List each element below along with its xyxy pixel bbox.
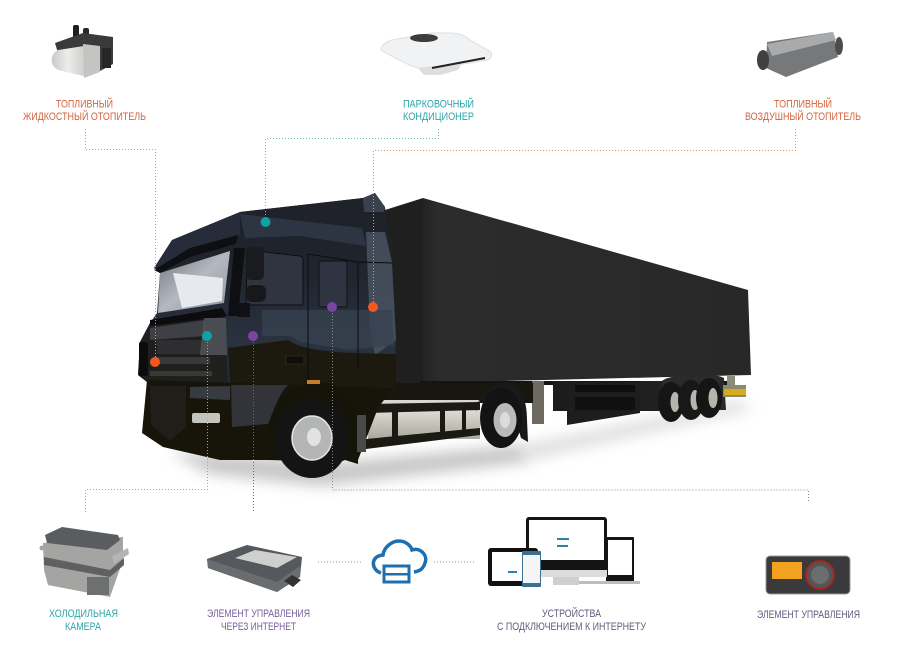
- label: fridge: КАМЕРА: [65, 621, 102, 633]
- front wheel: [268, 382, 358, 478]
- door reflection: [262, 310, 394, 350]
- lower door band: [228, 340, 396, 392]
- icon: air heater: [757, 32, 843, 77]
- label: internet control unit: [207, 608, 310, 633]
- label: liquid heater: ЖИДКОСТНЫЙ ОТОПИТЕЛЬ: [23, 110, 146, 123]
- label: fridge: [49, 608, 118, 633]
- truck illustration: [138, 193, 752, 486]
- icon: parking air conditioner: [381, 33, 492, 75]
- icon: control panel: [766, 556, 850, 594]
- cab rear panel: [366, 232, 396, 355]
- icon: liquid heater: [52, 25, 113, 78]
- icon: internet control unit: [207, 545, 302, 592]
- cab front panel: [138, 308, 228, 384]
- label: air heater: ВОЗДУШНЫЙ ОТОПИТЕЛЬ: [745, 110, 861, 123]
- marker dots: [150, 217, 378, 367]
- ground shadow: [170, 400, 752, 486]
- front grille: [150, 386, 186, 441]
- icon: cloud: [373, 541, 426, 582]
- label: parking air conditioner: ПАРКОВОЧНЫЙ: [403, 98, 474, 110]
- icon: fridge box: [40, 527, 129, 597]
- door lines: [308, 254, 392, 380]
- door handle: [286, 356, 304, 364]
- trailer wheels: [658, 378, 722, 422]
- connector lines: [86, 129, 808, 562]
- bumper highlight: [190, 386, 230, 400]
- exhaust pipe: [357, 415, 366, 452]
- step panel: [231, 385, 288, 427]
- cab roof visor: [154, 193, 385, 273]
- label: connected devices: С ПОДКЛЮЧЕНИЕМ К ИНТЕРНЕТУ: [497, 621, 647, 633]
- label: connected devices: УСТРОЙСТВА: [542, 607, 602, 620]
- front pillar: [228, 248, 245, 316]
- label: internet control unit: ЭЛЕМЕНТ УПРАВЛЕНИЯ: [207, 608, 310, 620]
- label: parking air conditioner: [403, 98, 474, 123]
- mirrors: [238, 247, 266, 317]
- trailer box: [385, 198, 751, 385]
- rear truck wheel: [476, 383, 528, 448]
- label: air heater: [745, 98, 861, 123]
- label: fridge: ХОЛОДИЛЬНАЯ: [49, 608, 118, 620]
- trailer undercarriage: [420, 374, 730, 425]
- label: connected devices: [497, 607, 647, 633]
- label: liquid heater: ТОПЛИВНЫЙ: [56, 98, 113, 110]
- fuel tanks and chassis: [366, 383, 533, 449]
- fog lamp: [192, 413, 220, 423]
- label: control panel: ЭЛЕМЕНТ УПРАВЛЕНИЯ: [757, 609, 860, 621]
- icon: connected devices: [488, 517, 640, 587]
- label: internet control unit: ЧЕРЕЗ ИНТЕРНЕТ: [221, 621, 296, 633]
- label: liquid heater: [23, 98, 146, 123]
- label: parking air conditioner: КОНДИЦИОНЕР: [403, 111, 474, 123]
- label: air heater: ТОПЛИВНЫЙ: [774, 98, 832, 110]
- cab body: [138, 193, 396, 392]
- side window: [246, 250, 303, 305]
- fender marker: [307, 380, 320, 384]
- lower bumper: [142, 380, 393, 460]
- sleeper window: [319, 261, 347, 307]
- windshield: [158, 251, 230, 313]
- rear bumper: [723, 376, 746, 397]
